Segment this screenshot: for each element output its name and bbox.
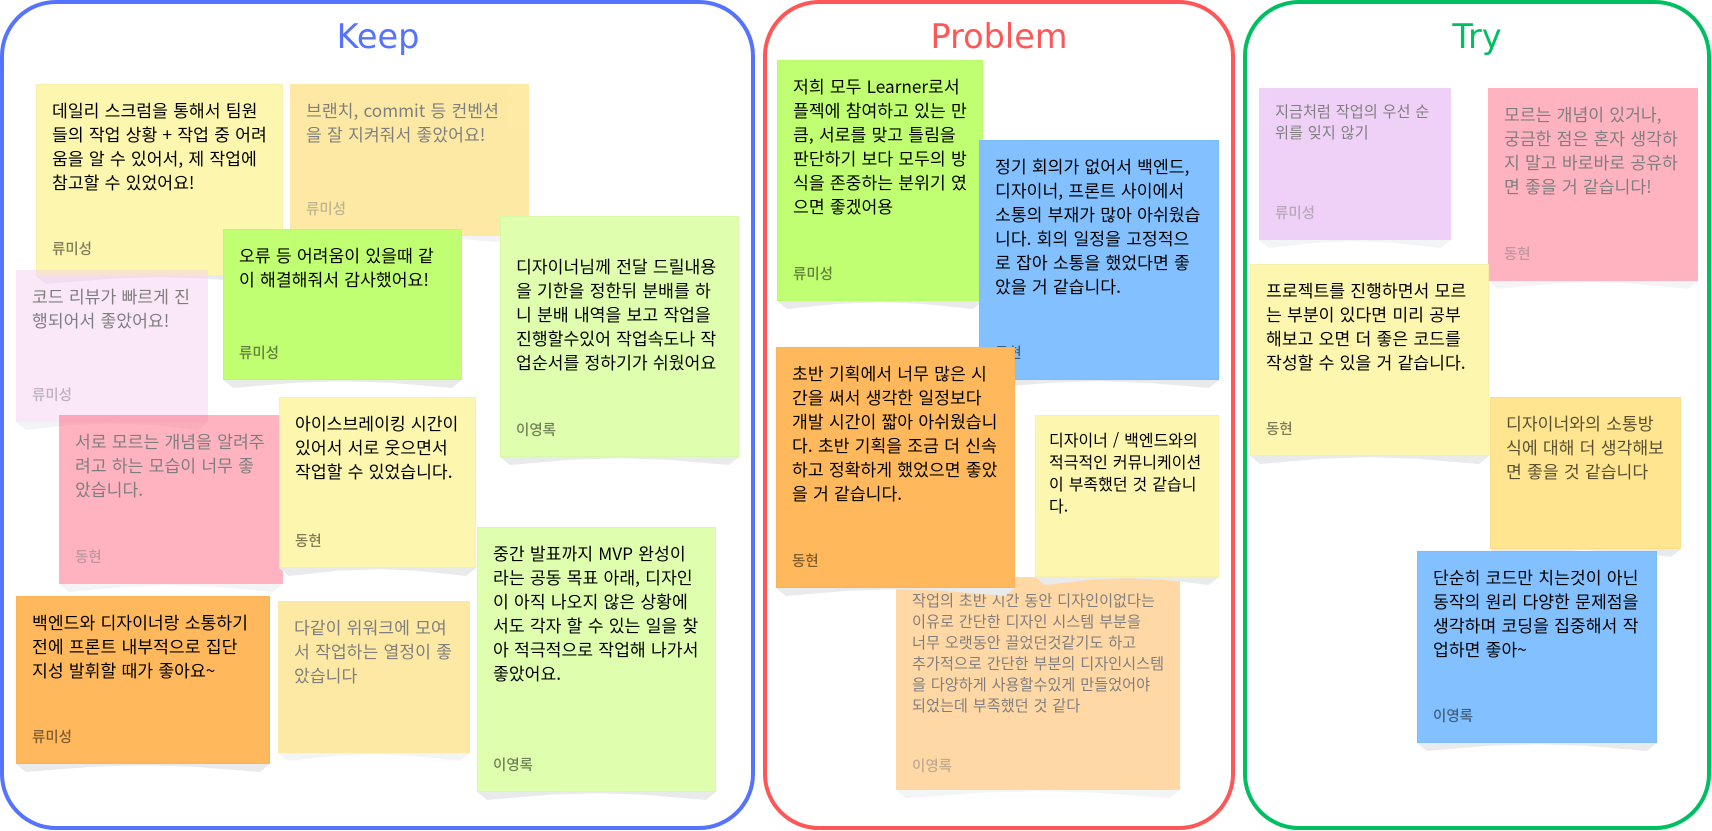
sticky note: ice breaking: 작업할 수 있었습니다.: [295, 458, 453, 483]
sticky note: share right away: 지 말고 바로바로 공유하: [1504, 149, 1678, 174]
sticky note: initial planning time: [776, 347, 1015, 588]
sticky note: study ahead: [1250, 264, 1489, 456]
sticky note: communication with designers: [1490, 397, 1681, 549]
sticky note: regular meetings: 았을 거 같습니다.: [995, 273, 1121, 298]
sticky note: teaching each other: 았습니다.: [75, 476, 143, 501]
sticky note: branch and commit convention: 브랜치, commit 등 컨벤션: [306, 97, 499, 122]
sticky note: daily scrum: [36, 84, 283, 276]
sticky note: design system time: 이유로 간단한 디자인 시스템 부분을: [912, 610, 1141, 632]
sticky note: solving errors together: 오류 등 어려움이 있을때 같: [239, 242, 434, 267]
sticky note: wework passion: 았습니다: [294, 662, 357, 687]
panel: Try: [1243, 0, 1711, 830]
sticky note: keep priorities: 류미성: [1275, 202, 1315, 223]
sticky note: focus on coding principles: 단순히 코드만 치는것이 아닌: [1433, 564, 1638, 589]
sticky note: keep priorities: [1259, 88, 1451, 240]
sticky note: solving errors together: [223, 229, 462, 380]
sticky note: designer drill delivery: 업순서를 정하기가 쉬웠어요: [516, 349, 716, 374]
sticky note: regular meetings: 소통의 부재가 많아 아쉬웠습: [995, 201, 1200, 226]
sticky note: focus on coding principles: 업하면 좋아~: [1433, 636, 1527, 661]
sticky note: focus on coding principles: [1417, 551, 1657, 743]
sticky note: front-end collective intelligence: [16, 596, 270, 764]
sticky note: wework passion: 다같이 위워크에 모여: [294, 614, 447, 639]
sticky note: designer drill delivery: 을 기한을 정한뒤 분배를 하: [516, 277, 711, 302]
sticky note: wework passion: 서 작업하는 열정이 좋: [294, 638, 452, 663]
sticky note: teaching each other: 려고 하는 모습이 너무 좋: [75, 452, 254, 477]
sticky note: study ahead: 동현: [1266, 418, 1293, 439]
sticky note: front-end collective intelligence: 백엔드와 디자이너랑 소통하기: [32, 609, 248, 634]
sticky note: initial planning time: 초반 기획에서 너무 많은 시: [792, 360, 987, 385]
sticky note: solving errors together: 류미성: [239, 342, 279, 363]
sticky note: MVP common goal: 라는 공동 목표 아래, 디자인: [493, 564, 693, 589]
sticky note: teaching each other: [59, 415, 283, 584]
sticky note: front-end collective intelligence: 류미성: [32, 726, 72, 747]
sticky note: learners atmosphere: 판단하기 보다 모두의 방: [793, 145, 967, 170]
sticky note: wework passion: [278, 601, 470, 753]
sticky note: ice breaking: 있어서 서로 웃으면서: [295, 434, 448, 459]
sticky note: design system time: 작업의 초반 시간 동안 디자인이없다는: [912, 589, 1155, 611]
sticky note: ice breaking: 아이스브레이킹 시간이: [295, 410, 458, 435]
sticky note: share right away: 면 좋을 거 같습니다!: [1504, 173, 1652, 198]
sticky note: daily scrum: 움을 알 수 있어서, 제 작업에: [52, 145, 257, 170]
sticky note: learners atmosphere: 류미성: [793, 263, 833, 284]
sticky note: MVP common goal: 아 적극적으로 작업해 나가서: [493, 636, 698, 661]
sticky note: branch and commit convention: 류미성: [306, 198, 346, 219]
sticky note: initial planning time: 동현: [792, 550, 819, 571]
sticky note: front-end collective intelligence: 지성 발휘할 때가 좋아요~: [32, 657, 215, 682]
sticky note: active communication: 디자이너 / 백엔드와의: [1049, 427, 1198, 451]
sticky note: daily scrum: 류미성: [52, 238, 92, 259]
sticky note: keep priorities: 위를 잊지 않기: [1275, 121, 1369, 143]
sticky note: MVP common goal: 좋았어요.: [493, 660, 561, 685]
sticky note: share right away: 궁금한 점은 혼자 생각하: [1504, 125, 1678, 150]
sticky note: focus on coding principles: 동작의 원리 다양한 문제점을: [1433, 588, 1638, 613]
heading: Try: Try: [1452, 17, 1502, 56]
sticky note: teaching each other: 동현: [75, 546, 102, 567]
sticky note: designer drill delivery: 진행할수있어 작업속도나 작: [516, 325, 716, 350]
sticky note: learners atmosphere: 저희 모두 Learner로서: [793, 73, 960, 98]
sticky note: daily scrum: 데일리 스크럼을 통해서 팀원: [52, 97, 257, 122]
heading: Keep: Keep: [337, 17, 419, 56]
sticky note: initial planning time: 간을 써서 생각한 일정보다: [792, 384, 982, 409]
sticky note: learners atmosphere: 플젝에 참여하고 있는 만: [793, 97, 967, 122]
sticky note: active communication: 적극적인 커뮤니케이션: [1049, 449, 1201, 473]
sticky note: communication with designers: 면 좋을 것 같습니다: [1506, 458, 1648, 483]
sticky note: solving errors together: 이 해결해줘서 감사했어요!: [239, 266, 429, 291]
sticky note: branch and commit convention: [290, 84, 529, 236]
sticky note: design system time: 이영록: [912, 755, 952, 776]
sticky note: MVP common goal: 이 아직 나오지 않은 상황에: [493, 588, 688, 613]
sticky note: MVP common goal: [477, 527, 716, 792]
sticky note: MVP common goal: 이영록: [493, 754, 533, 775]
sticky note: initial planning time: 개발 시간이 짧아 아쉬웠습니: [792, 408, 997, 433]
sticky note: daily scrum: 들의 작업 상황 + 작업 중 어려: [52, 121, 267, 146]
panel: Keep: [0, 0, 755, 830]
sticky note: initial planning time: 다. 초반 기획을 조금 더 신속: [792, 432, 997, 457]
sticky note: study ahead: 는 부분이 있다면 미리 공부: [1266, 301, 1461, 326]
sticky note: learners atmosphere: 식을 존중하는 분위기 였: [793, 169, 967, 194]
sticky note: learners atmosphere: 큼, 서로를 맞고 틀림을: [793, 121, 956, 146]
sticky note: teaching each other: 서로 모르는 개념을 알려주: [75, 428, 265, 453]
sticky note: focus on coding principles: 이영록: [1433, 705, 1473, 726]
sticky note: share right away: [1488, 88, 1698, 281]
sticky note: design system time: 되었는데 부족했던 것 같다: [912, 694, 1080, 716]
sticky note: designer drill delivery: 디자이너님께 전달 드릴내용: [516, 253, 716, 278]
sticky note: ice breaking: 동현: [295, 530, 322, 551]
sticky note: MVP common goal: 중간 발표까지 MVP 완성이: [493, 540, 686, 565]
sticky note: designer drill delivery: 이영록: [516, 419, 556, 440]
sticky note: code review: 행되어서 좋았어요!: [32, 307, 169, 332]
sticky note: active communication: 다.: [1049, 493, 1068, 517]
heading: Problem: Problem: [931, 17, 1067, 56]
sticky note: communication with designers: 디자이너와의 소통방: [1506, 410, 1654, 435]
sticky note: keep priorities: 지금처럼 작업의 우선 순: [1275, 100, 1429, 122]
sticky note: MVP common goal: 서도 각자 할 수 있는 일을 찾: [493, 612, 698, 637]
panel: Problem: [763, 0, 1235, 830]
sticky note: initial planning time: 을 거 같습니다.: [792, 480, 902, 505]
sticky note: regular meetings: 정기 회의가 없어서 백엔드,: [995, 153, 1189, 178]
sticky note: share right away: 동현: [1504, 243, 1531, 264]
sticky note: active communication: [1035, 415, 1219, 577]
sticky note: code review: 코드 리뷰가 빠르게 진: [32, 283, 190, 308]
sticky note: branch and commit convention: 을 잘 지켜줘서 좋았어요!: [306, 121, 485, 146]
sticky note: learners atmosphere: 으면 좋겠어용: [793, 193, 893, 218]
sticky note: share right away: 모르는 개념이 있거나,: [1504, 101, 1662, 126]
sticky note: design system time: 을 다양하게 사용할수있게 만들었어야: [912, 673, 1150, 695]
sticky note: active communication: 이 부족했던 것 같습니: [1049, 471, 1196, 495]
sticky note: regular meetings: [979, 140, 1219, 380]
sticky note: code review: 류미성: [32, 384, 72, 405]
sticky note: daily scrum: 참고할 수 있었어요!: [52, 169, 194, 194]
sticky note: regular meetings: 디자이너, 프론트 사이에서: [995, 177, 1184, 202]
sticky note: front-end collective intelligence: 전에 프론트 내부적으로 집단: [32, 633, 237, 658]
sticky note: regular meetings: 동현: [995, 342, 1022, 363]
sticky note: learners atmosphere: [777, 60, 983, 301]
sticky note: design system time: 추가적으로 간단한 부분의 디자인시스템: [912, 652, 1164, 674]
sticky note: code review: [16, 270, 208, 422]
sticky note: regular meetings: 로 잡아 소통을 했었다면 좋: [995, 249, 1190, 274]
sticky note: initial planning time: 하고 정확하게 했었으면 좋았: [792, 456, 997, 481]
sticky note: regular meetings: 니다. 회의 일정을 고정적으: [995, 225, 1189, 250]
sticky note: communication with designers: 식에 대해 더 생각해보: [1506, 434, 1664, 459]
sticky note: designer drill delivery: [500, 216, 739, 457]
sticky note: ice breaking: [279, 397, 476, 568]
sticky note: focus on coding principles: 생각하며 코딩을 집중해서 작: [1433, 612, 1638, 637]
sticky note: design system time: [896, 577, 1180, 790]
sticky note: study ahead: 작성할 수 있을 거 같습니다.: [1266, 349, 1466, 374]
sticky note: designer drill delivery: 니 분배 내역을 보고 작업을: [516, 301, 711, 326]
sticky note: study ahead: 프로젝트를 진행하면서 모르: [1266, 277, 1466, 302]
sticky note: study ahead: 해보고 오면 더 좋은 코드를: [1266, 325, 1461, 350]
sticky note: design system time: 너무 오랫동안 끌었던것같기도 하고: [912, 631, 1136, 653]
